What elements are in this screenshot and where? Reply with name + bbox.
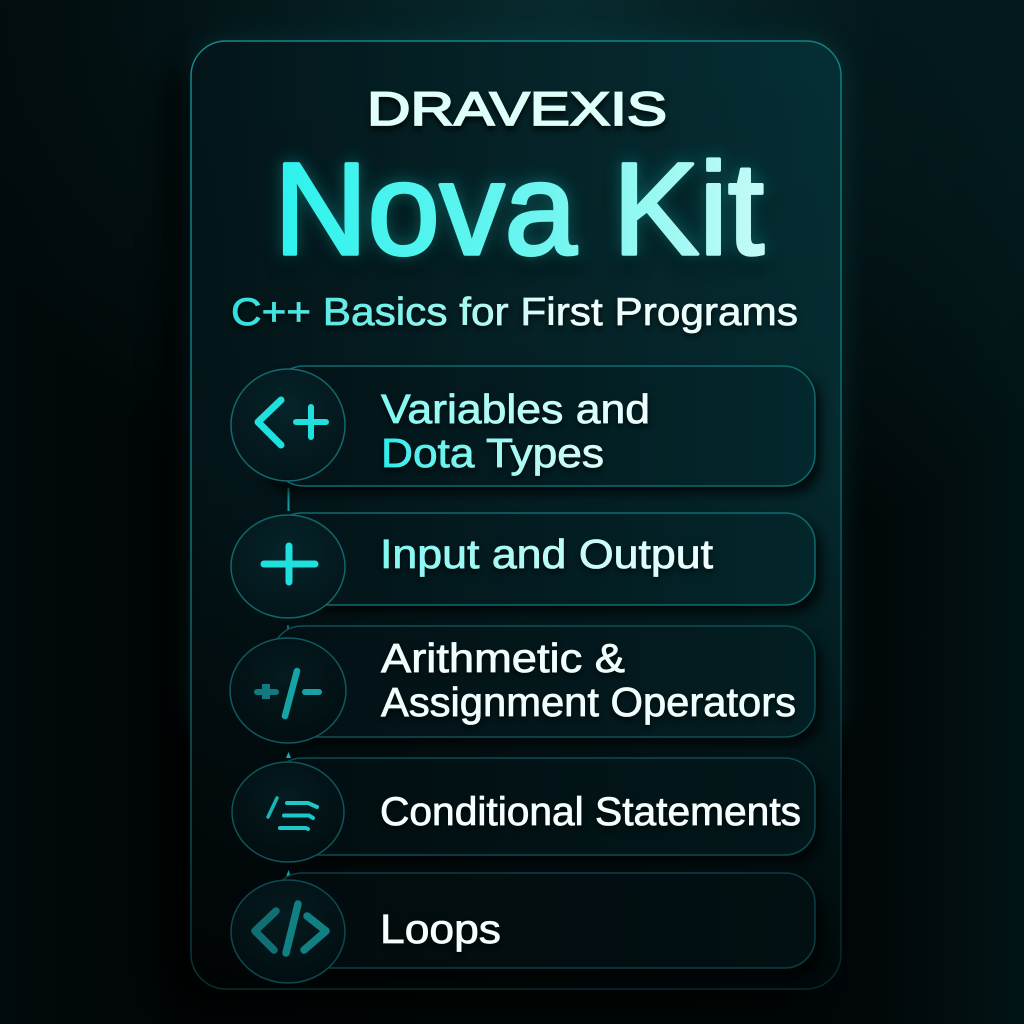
label: Conditional Statements: Conditional Statements <box>380 790 801 834</box>
label: Dota Types: Dota Types <box>381 433 604 479</box>
label: Arithmetic &: Arithmetic & <box>381 635 625 681</box>
label: Conditional Statements: Conditional Statements <box>380 793 801 837</box>
row: Loops <box>231 873 821 983</box>
subtitle: C++ Basics for First Programs <box>231 294 798 337</box>
icon: plus slash minus <box>230 638 346 743</box>
title: Nova Kit <box>274 144 764 291</box>
heading: brand name: DRAVEXIS <box>367 82 667 135</box>
label: Loops: Loops <box>380 909 501 955</box>
label: Input and Output: Input and Output <box>380 531 714 577</box>
label: Variables and: Variables and <box>381 386 650 432</box>
title: Nova Kit <box>274 135 764 282</box>
icon: plus <box>231 515 345 618</box>
title: Nova Kit <box>274 135 764 282</box>
row: Arithmetic and Assignment Operators <box>230 626 821 745</box>
label: Variables and: Variables and <box>381 389 650 435</box>
connector line: rows 1 to 2 <box>288 488 290 511</box>
label: Loops: Loops <box>380 906 501 952</box>
row: Variables and Data Types <box>231 366 821 494</box>
label: Dota Types: Dota Types <box>381 430 604 476</box>
connector tick: row 3 <box>287 625 289 635</box>
label: Assignment Operators: Assignment Operators <box>381 679 796 725</box>
icon: code brackets <box>231 880 345 983</box>
connector tick: row 5 <box>286 870 291 877</box>
label: Input and Output: Input and Output <box>380 534 714 580</box>
icon: branching lines <box>232 762 344 862</box>
connector tick: row 4 <box>286 752 291 758</box>
subtitle: C++ Basics for First Programs <box>231 291 798 334</box>
icon: chevron plus <box>231 369 345 481</box>
panel: main card <box>165 40 842 1005</box>
label: Arithmetic &: Arithmetic & <box>381 638 625 684</box>
row: Conditional Statements <box>232 758 821 863</box>
label: Assignment Operators: Assignment Operators <box>381 682 796 728</box>
heading: brand name: DRAVEXIS <box>367 86 667 139</box>
row: Input and Output <box>231 513 821 618</box>
